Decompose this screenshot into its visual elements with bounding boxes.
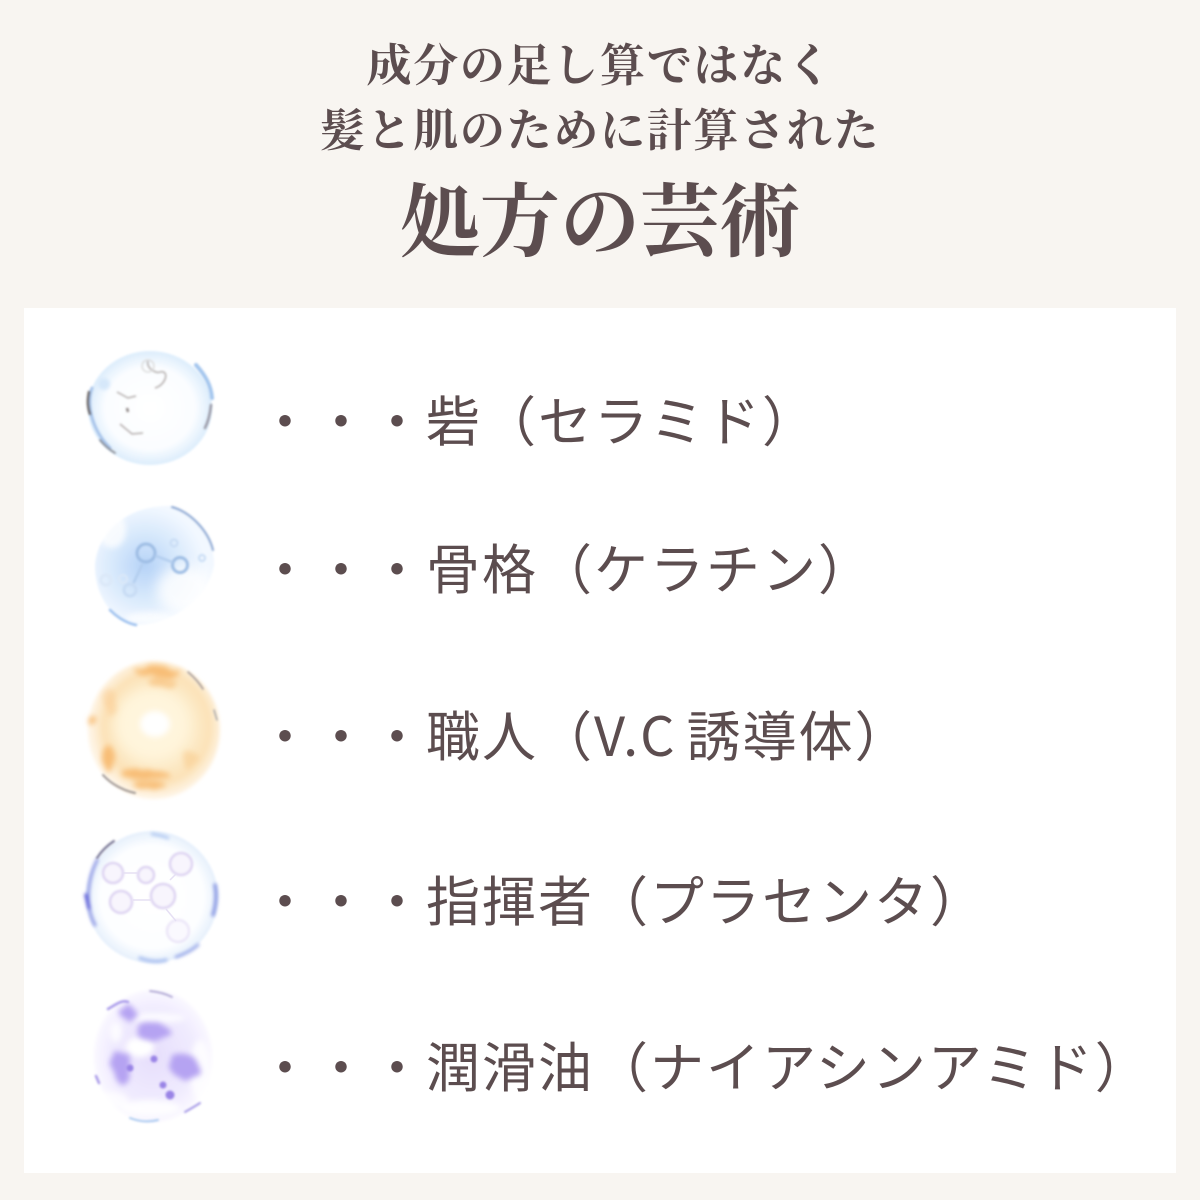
icon: vitamin C bubble — [88, 661, 220, 799]
icon: placenta bubble — [86, 831, 218, 963]
main title: 処方の芸術 — [400, 158, 800, 273]
icon: ceramide bubble — [88, 351, 212, 465]
panel: ingredient list — [24, 308, 1176, 1173]
list row text 2: ・・・骨格（ケラチン） — [258, 526, 874, 605]
heading line 2: 髪と肌のために計算された — [320, 94, 880, 159]
list row text 4: ・・・指揮者（プラセンタ） — [258, 858, 986, 937]
list row text 1: ・・・砦（セラミド） — [258, 378, 818, 457]
icon: keratin bubble — [95, 506, 214, 625]
list row text 5: ・・・潤滑油（ナイアシンアミド） — [258, 1024, 1151, 1103]
list row text 3: ・・・職人（V.C 誘導体） — [258, 693, 911, 772]
icon: niacinamide bubble — [94, 990, 212, 1122]
heading line 1: 成分の足し算ではなく — [366, 29, 834, 94]
